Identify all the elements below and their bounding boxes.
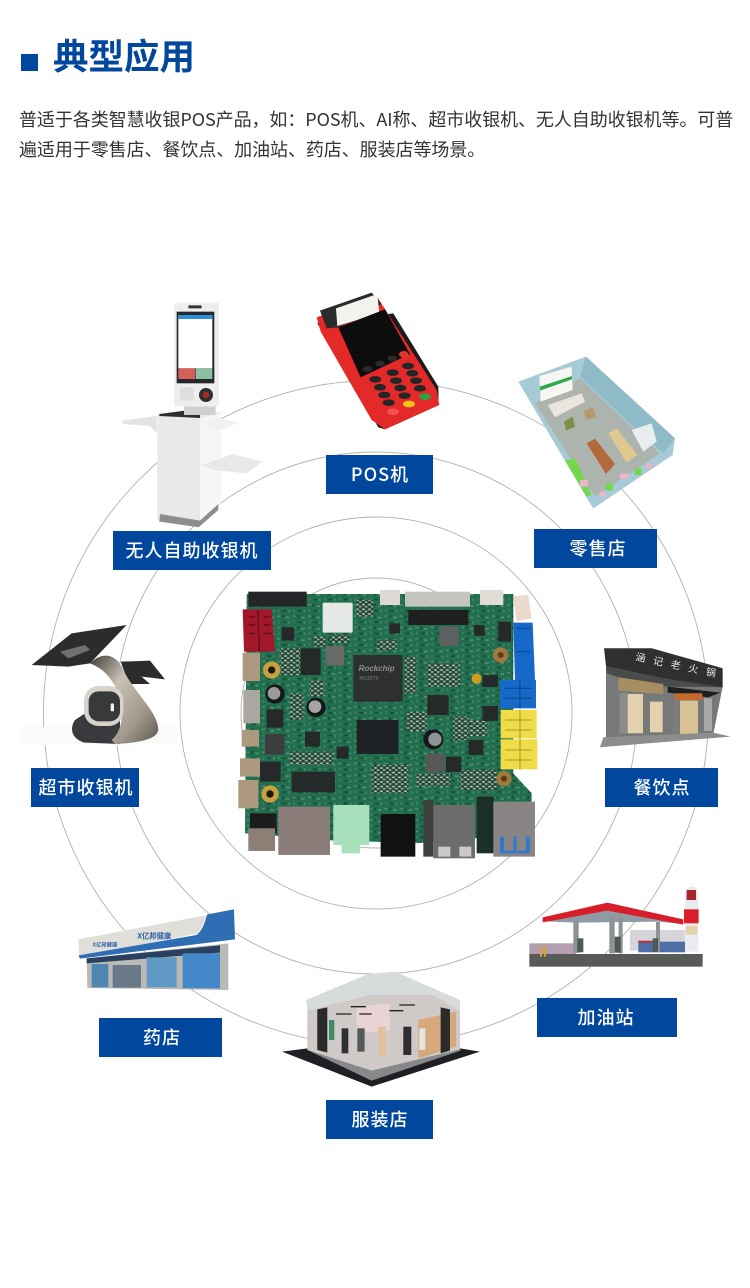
blue fascia xyxy=(79,909,235,959)
label: 药店: 药店 xyxy=(143,1024,181,1050)
facade xyxy=(606,665,723,738)
label: 服装店 xyxy=(326,1100,433,1139)
image: gas station xyxy=(529,887,703,967)
ceiling lights band xyxy=(618,677,663,694)
station building xyxy=(630,930,685,952)
base xyxy=(72,713,120,744)
price totem xyxy=(684,887,699,952)
brass standoffs xyxy=(261,647,512,803)
image: pharmacy xyxy=(78,909,235,990)
label: POS机: POS机 xyxy=(351,461,409,487)
POS body xyxy=(317,296,439,429)
ground xyxy=(529,954,703,967)
soffit xyxy=(606,666,723,687)
black pin header xyxy=(248,592,307,607)
kiosk neck xyxy=(184,405,216,415)
wifi module xyxy=(323,603,353,633)
kiosk body xyxy=(157,412,221,526)
label: 无人自助收银机 xyxy=(113,531,271,570)
POS dark underside xyxy=(317,313,439,429)
function keys xyxy=(387,393,431,415)
scanner head xyxy=(84,686,123,726)
label: 超市收银机 xyxy=(31,768,139,807)
floor xyxy=(282,1048,480,1087)
main screen xyxy=(32,625,127,667)
red canopy xyxy=(543,903,683,925)
rear screen xyxy=(121,661,165,684)
intro text: 普适于各类智慧收银POS产品，如：POS机、AI称、超市收银机、无人自助收银机等。可普 xyxy=(19,106,733,132)
concentric rings xyxy=(44,380,708,1046)
shop windows xyxy=(92,953,220,988)
rear wall xyxy=(529,943,576,954)
left shelf xyxy=(122,416,157,433)
shop front xyxy=(87,943,228,990)
title marker square xyxy=(21,54,38,71)
label: 餐饮点 xyxy=(605,768,718,807)
label: 加油站 xyxy=(537,998,677,1037)
green front seating xyxy=(565,458,653,497)
label: 零售店: 零售店 xyxy=(570,535,626,561)
display shelves xyxy=(564,408,657,474)
label: 超市收银机: 超市收银机 xyxy=(38,774,134,800)
image: circuit board xyxy=(238,590,537,858)
beige left connectors xyxy=(238,653,260,808)
audio jack xyxy=(333,805,369,853)
main processor: Rockchip xyxy=(359,664,395,673)
title: 典型应用 xyxy=(53,29,195,80)
component clusters xyxy=(280,600,497,793)
softkeys xyxy=(363,351,408,372)
label: 餐饮点: 餐饮点 xyxy=(634,774,690,800)
main processor xyxy=(353,655,403,702)
image: self-service kiosk xyxy=(122,303,263,527)
track lights xyxy=(336,1005,415,1014)
roof sign: 涵记老火锅 xyxy=(634,648,725,682)
sales counter xyxy=(548,393,585,417)
label: 服装店: 服装店 xyxy=(352,1106,408,1132)
intro text: 遍适用于零售店、餐饮点、加油站、药店、服装店等场景。 xyxy=(19,136,485,162)
usb ports xyxy=(423,797,535,858)
marble roof xyxy=(306,972,460,1012)
inductors xyxy=(265,627,459,773)
kiosk monitor xyxy=(174,303,219,407)
interior xyxy=(307,995,460,1071)
image: POS terminal xyxy=(317,293,439,429)
yellow bollards xyxy=(540,947,546,957)
red connectors xyxy=(243,609,275,652)
number keys xyxy=(369,363,426,406)
right shelf xyxy=(202,454,263,473)
base plinth xyxy=(600,733,731,747)
door awning xyxy=(668,687,721,697)
label: 药店 xyxy=(99,1018,222,1057)
curved stand xyxy=(90,656,158,744)
image: clothing store xyxy=(282,972,480,1087)
white fascia xyxy=(78,915,207,957)
store floor xyxy=(535,378,660,497)
memory chip xyxy=(357,720,398,754)
small chips xyxy=(260,622,511,792)
label: POS机 xyxy=(326,455,433,494)
ethernet port xyxy=(278,807,330,855)
back wall sign xyxy=(539,367,573,402)
black connector xyxy=(381,814,415,857)
image: retail store xyxy=(518,357,675,508)
doors and windows xyxy=(619,693,712,734)
dc power jack xyxy=(248,813,277,851)
label: 零售店 xyxy=(534,529,657,568)
main processor: RK3576 xyxy=(359,676,379,682)
canopy underside xyxy=(543,909,683,924)
label: 无人自助收银机: 无人自助收银机 xyxy=(126,537,258,563)
white top connectors xyxy=(380,590,532,625)
glass walls xyxy=(518,357,675,508)
label: 加油站: 加油站 xyxy=(578,1004,634,1030)
receipt paper xyxy=(336,294,379,326)
canopy pillars and pumps xyxy=(573,917,660,953)
soft shadow xyxy=(20,727,177,745)
capacitors xyxy=(265,684,443,749)
pink front items xyxy=(580,473,628,496)
side bracket xyxy=(208,418,238,430)
image: supermarket cashier xyxy=(20,625,177,745)
orange shop sign xyxy=(675,693,702,700)
pharmacy logos: X亿邦健康 xyxy=(93,941,118,949)
image: restaurant storefront xyxy=(600,648,731,747)
dark window header xyxy=(87,945,220,963)
blue connectors xyxy=(500,623,536,708)
intro text xyxy=(19,106,733,162)
pharmacy logos xyxy=(93,930,172,949)
connector details xyxy=(505,628,532,708)
POS screen xyxy=(338,309,410,377)
PCB base xyxy=(245,594,532,843)
mannequins and racks xyxy=(329,1020,425,1057)
pharmacy logos: X亿邦健康 xyxy=(137,930,172,941)
yellow connectors xyxy=(501,710,537,769)
printer cover xyxy=(320,293,382,328)
